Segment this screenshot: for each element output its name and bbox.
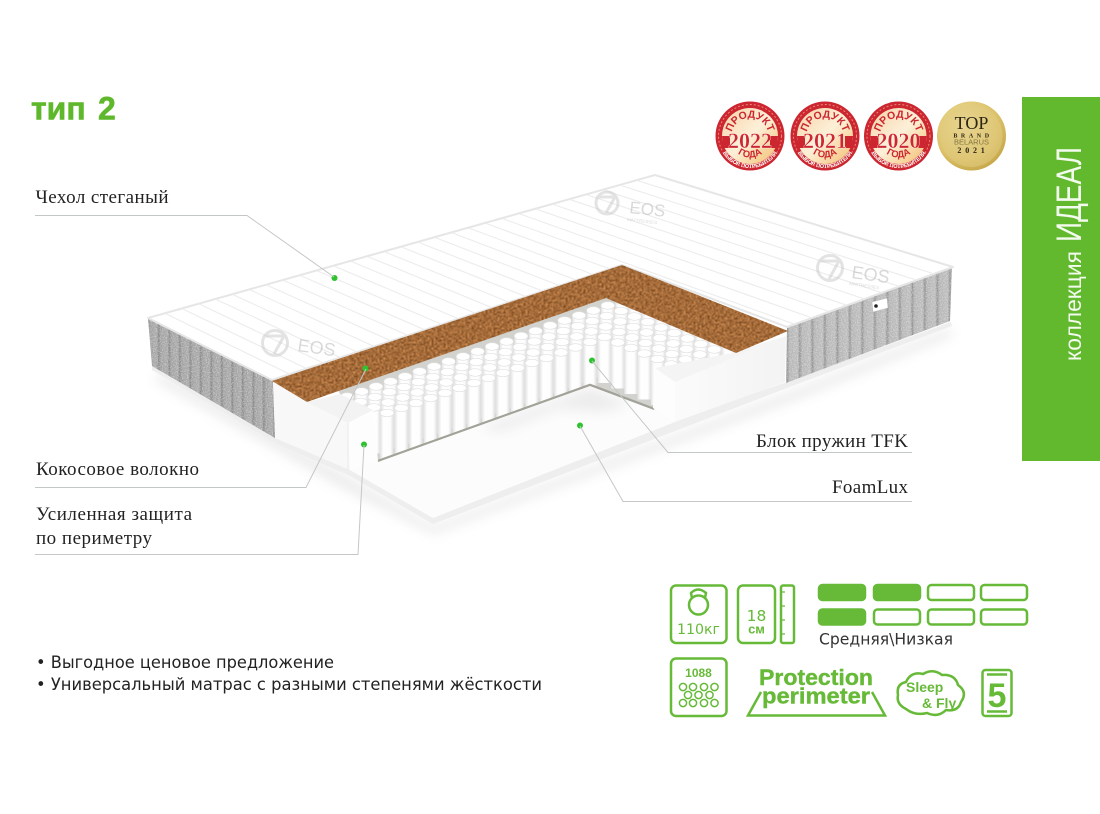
icon: five year warranty: 5	[988, 677, 1006, 715]
logo: EOS front: EOS	[296, 335, 337, 360]
icon: spring count: 1088	[685, 666, 712, 680]
firmness scale: Средняя\Низкая	[819, 630, 953, 648]
badge: product of the year 2022: 2022	[728, 128, 772, 153]
badge: product of the year 2020: ВЫБОР ПОТРЕБИТЕЛЯ	[872, 151, 926, 168]
badge: product of the year 2021: ПРОДУКТ	[800, 110, 850, 132]
benefits list	[36, 653, 542, 694]
spec icons	[671, 585, 1027, 716]
logo: EOS rear: MATTRESSES	[627, 217, 657, 225]
callout: coconut fibre	[35, 369, 366, 488]
logo: EOS rear	[596, 192, 666, 225]
icon: height: 18	[747, 607, 766, 625]
badge: product of the year 2020: ПРОДУКТ	[874, 110, 924, 132]
benefits list: • Универсальный матрас с разными степенями жёсткости	[36, 675, 542, 694]
icon: sleep and fly	[898, 671, 964, 715]
logo: EOS front	[262, 330, 337, 360]
icon: protection perimeter	[748, 665, 885, 716]
logo: EOS rear: EOS	[629, 198, 666, 221]
badge: product of the year 2021	[790, 102, 860, 170]
side panel: left	[148, 318, 275, 438]
marker dots	[332, 275, 595, 448]
icon: max weight: 110кг	[677, 622, 720, 638]
icon: sleep and fly: Sleep	[906, 679, 943, 695]
collection name: коллекция	[1060, 251, 1086, 361]
title: тип	[31, 90, 86, 126]
brand tag	[872, 298, 888, 312]
callout: FoamLux: FoamLux	[832, 477, 908, 498]
callout: spring block	[592, 361, 912, 452]
badge: top brand belarus 2021: BRAND	[953, 134, 993, 140]
badge: top brand belarus 2021	[937, 102, 1006, 170]
collection name: ИДЕАЛ	[1050, 147, 1089, 242]
badge: product of the year 2020: ГОДА	[886, 148, 911, 160]
benefits list: • Выгодное ценовое предложение	[36, 653, 334, 672]
callout: spring block: Блок пружин TFK	[756, 431, 908, 452]
mattress top quilted	[147, 174, 954, 381]
callout: reinforced perimeter: Усиленная защита	[36, 504, 193, 525]
coconut fibre layer	[272, 265, 788, 402]
badge: top brand belarus 2021: BELARUS	[954, 138, 989, 146]
icon: height: см	[748, 622, 765, 636]
icon: height	[738, 586, 794, 643]
badge: top brand belarus 2021: TOP	[955, 113, 988, 133]
callout: FoamLux	[580, 426, 912, 502]
panel: collection	[1022, 97, 1100, 461]
badge: top brand belarus 2021: 2021	[957, 146, 989, 155]
reinforced perimeter foam: front	[273, 382, 378, 470]
collection name	[1050, 147, 1089, 361]
logo: EOS right: EOS	[850, 262, 891, 287]
badge: product of the year 2021: ГОДА	[813, 148, 838, 160]
title: 2	[98, 90, 116, 126]
badge: product of the year 2022: ГОДА	[738, 148, 762, 160]
badge: product of the year 2022: ВЫБОР ПОТРЕБИТЕЛЯ	[723, 151, 777, 168]
shadows	[155, 328, 952, 534]
badge: product of the year 2022: ПРОДУКТ	[725, 110, 775, 132]
callout: reinforced perimeter: по периметру	[36, 528, 152, 549]
award badges	[716, 102, 1006, 170]
callout: quilted cover: Чехол стеганый	[36, 187, 168, 208]
badge: product of the year 2020	[864, 102, 933, 170]
logo: EOS right	[818, 256, 891, 290]
icon: five year warranty	[982, 670, 1012, 716]
badge: product of the year 2021: ВЫБОР ПОТРЕБИТЕЛЯ	[798, 151, 852, 168]
mattress illustration	[148, 175, 953, 534]
side panel: right	[786, 268, 952, 383]
firmness scale	[819, 585, 1027, 648]
callout: quilted cover	[35, 187, 334, 277]
badge: product of the year 2021: 2021	[803, 128, 847, 153]
icon: max weight	[671, 586, 726, 643]
badge: product of the year 2022	[716, 102, 784, 170]
badge: product of the year 2020: 2020	[876, 128, 920, 153]
icon: sleep and fly: & Fly	[922, 695, 956, 711]
callout: reinforced perimeter	[35, 445, 364, 554]
icon: spring count	[671, 658, 726, 716]
reinforced perimeter foam: right	[653, 336, 786, 422]
icon: protection perimeter: Protection	[759, 665, 873, 690]
spring block	[335, 290, 745, 462]
base foam slab	[152, 322, 952, 524]
callout: coconut fibre: Кокосовое волокно	[36, 459, 199, 480]
logo: EOS right: MATTRESSES	[849, 281, 879, 290]
icon: protection perimeter: perimeter	[762, 684, 870, 708]
